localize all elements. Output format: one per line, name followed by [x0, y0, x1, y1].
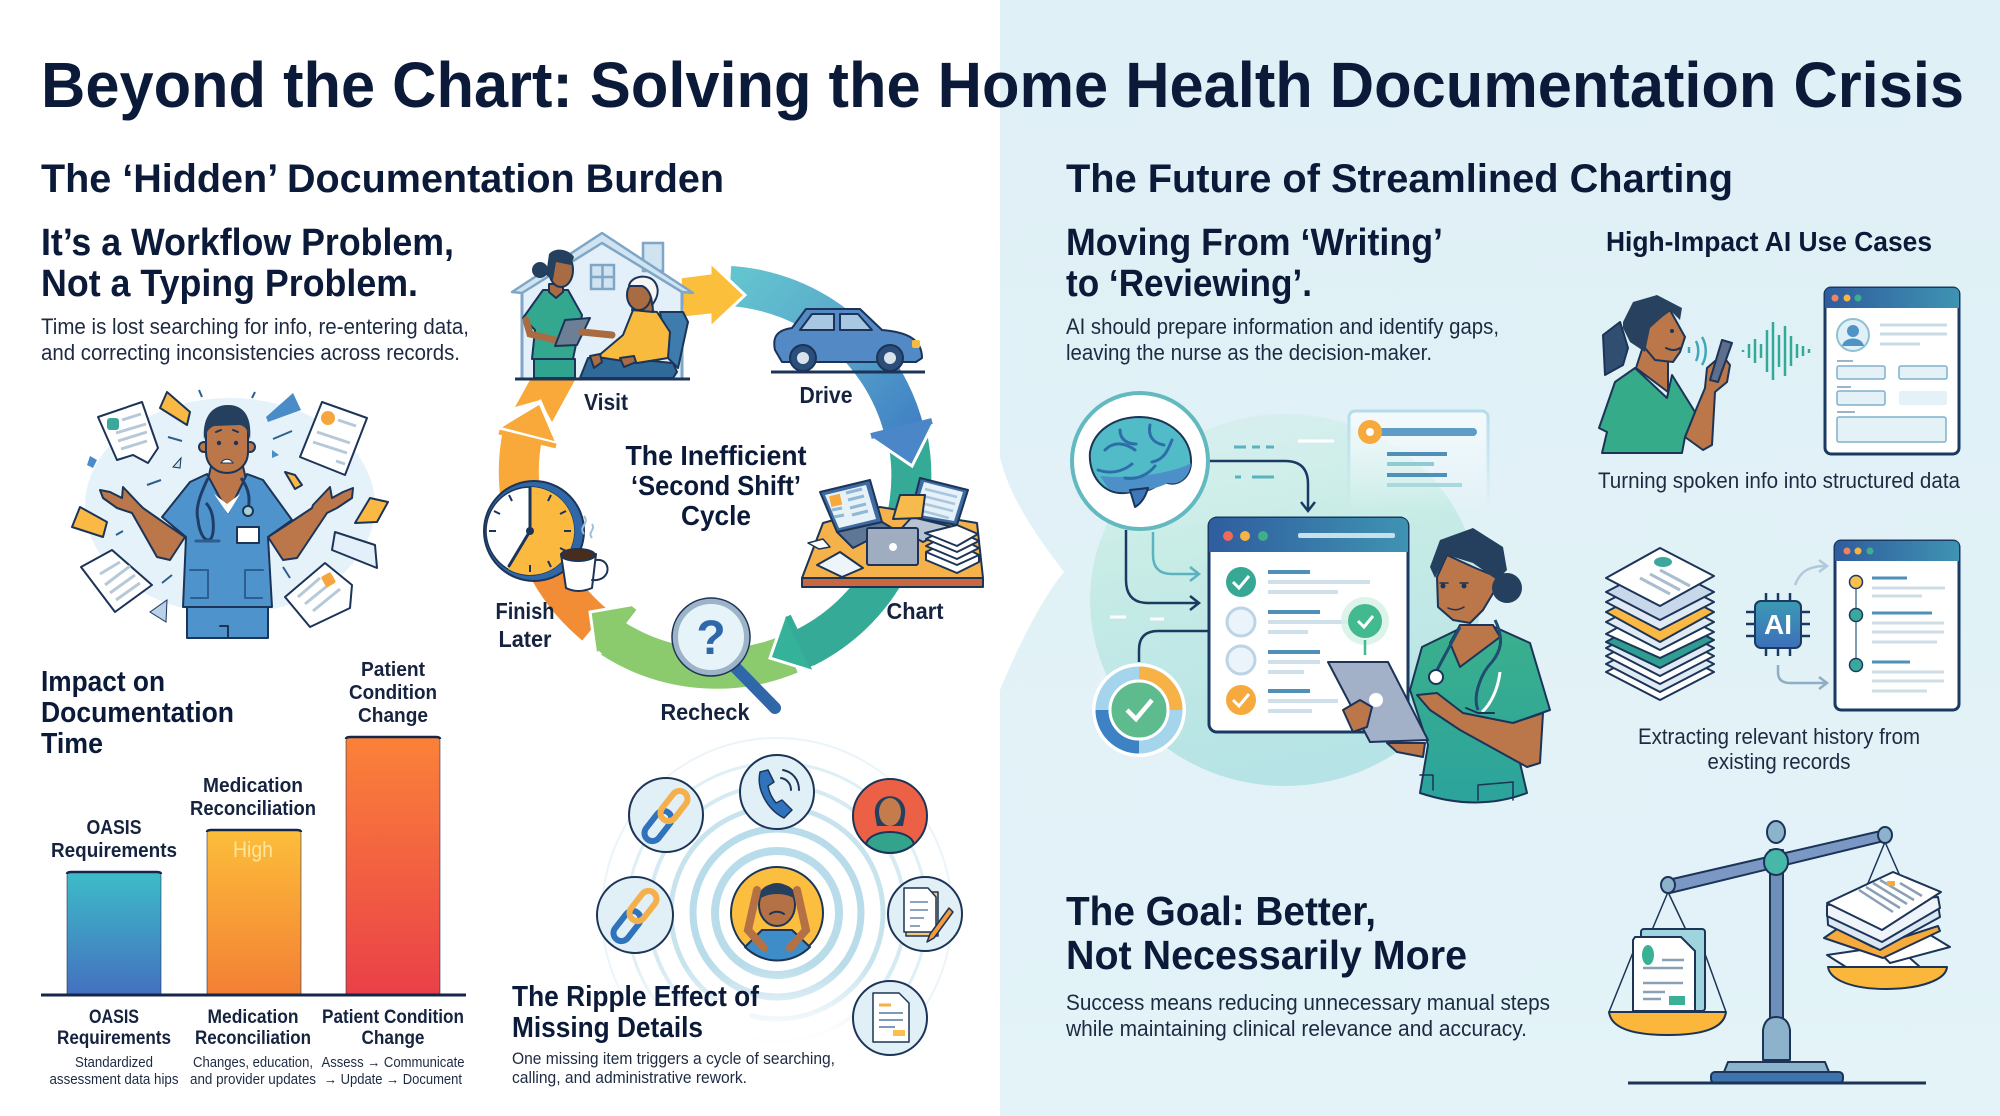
beam [1668, 830, 1888, 893]
icon: stack of records [1606, 548, 1714, 700]
bar: medication reconciliation: High [233, 837, 273, 862]
right pan documents [1824, 872, 1950, 989]
icon: broken link [629, 778, 703, 852]
papers [81, 402, 377, 627]
chart heading: Documentation [41, 697, 234, 729]
icon: car [771, 309, 925, 372]
arrow: finish later segment [545, 562, 595, 625]
use case: spoken info to structured data [1598, 288, 1961, 493]
labels: below bars: Medication [208, 1007, 298, 1028]
strings right [1866, 842, 1900, 888]
text block: the goal [1065, 888, 1550, 1041]
label: cycle title: The Inefficient [626, 440, 806, 471]
neck [206, 462, 248, 510]
label: cycle title: Cycle [681, 500, 751, 531]
labels: below bars: Reconciliation [195, 1028, 311, 1049]
patient chair [660, 312, 688, 368]
panel: left white background [0, 0, 1000, 1116]
caption [1638, 724, 1920, 774]
arms [100, 487, 353, 560]
scrubs [162, 474, 292, 607]
icon: form window [1825, 288, 1959, 454]
icon: magnifier with question mark [672, 598, 775, 708]
text block: ripple effect: Missing Details [512, 1012, 703, 1044]
icon: broken link 2 [597, 877, 673, 953]
arrow: chart segment [770, 440, 911, 672]
text block: writing to reviewing: AI should prepare information and identify gaps, [1066, 314, 1499, 339]
labels: below bars: Standardized [75, 1054, 153, 1071]
faded background window [1349, 411, 1488, 511]
text block: workflow problem: and correcting inconsistencies across records. [41, 340, 460, 365]
panel: right pale blue background [1000, 0, 2000, 1116]
illustration: overwhelmed nurse with flying papers [72, 390, 388, 638]
icon: sound wave [1743, 322, 1809, 380]
icon: brain [1072, 393, 1208, 529]
icon: timeline window [1835, 541, 1959, 710]
yellow fragments [72, 392, 388, 537]
text block: writing to reviewing: Moving From ‘Writing’ [1066, 222, 1443, 264]
labels: cycle steps: Later [498, 626, 552, 652]
labels: below bars [50, 1007, 464, 1088]
arrow: return to visit [497, 380, 575, 520]
labels: below bars: Requirements [57, 1028, 171, 1049]
tablet [1328, 662, 1428, 742]
icon: phone [740, 755, 814, 829]
pole [1770, 850, 1783, 1030]
illustration: ripple effect of missing details [500, 738, 962, 1116]
connectors [1126, 461, 1315, 662]
labels: below bars: Assess → Communicate [322, 1054, 464, 1071]
use case: extracting history from records [1606, 541, 1959, 774]
icon: AI chip [1746, 593, 1810, 656]
labels: above bars: Condition [349, 682, 437, 704]
head [1437, 555, 1497, 623]
labels: above bars [51, 659, 437, 862]
labels: below bars: OASIS [89, 1007, 139, 1028]
forearm [1417, 693, 1543, 767]
icon: document [853, 981, 927, 1055]
illustration: AI prepares, nurse reviews [1072, 393, 1550, 802]
text block: writing to reviewing: to ‘Reviewing’. [1066, 263, 1312, 305]
labels: cycle steps: Finish [496, 598, 554, 624]
heading: left section: The ‘Hidden’ Documentation Burden [41, 157, 724, 201]
labels: cycle steps: Chart [886, 598, 944, 624]
text block: the goal: The Goal: Better, [1066, 888, 1376, 934]
text block: ripple effect: calling, and administrative rework. [512, 1068, 747, 1087]
strings left [1609, 892, 1726, 1012]
text block: workflow problem: Time is lost searching for info, re-entering data, [41, 314, 469, 339]
labels: above bars: Requirements [51, 840, 177, 862]
icon: clock and coffee [484, 481, 608, 591]
icon: magnifier with question mark: ? [696, 612, 726, 665]
icon: checklist window [1209, 518, 1408, 732]
labels: above bars: Change [358, 705, 428, 727]
icon: woman speaking into phone [1599, 295, 1732, 453]
left pan documents [1609, 929, 1726, 1035]
labels: below bars: Change [362, 1028, 424, 1049]
arrow: recheck segment [590, 604, 790, 669]
chart: impact on documentation time [41, 659, 466, 1088]
icon: cluttered desk [802, 478, 983, 587]
chart heading: Time [41, 728, 103, 760]
icon: AI chip: AI [1764, 609, 1792, 640]
text block: writing to reviewing: leaving the nurse as the decision-maker. [1066, 340, 1432, 365]
stethoscope [1437, 620, 1501, 710]
icon: nurse with tablet [1328, 528, 1550, 802]
text block: workflow problem: It’s a Workflow Problem, [41, 222, 454, 264]
text block: workflow problem: Not a Typing Problem. [41, 263, 418, 305]
title: Beyond the Chart: Solving the Home Health Documentation Crisis [41, 49, 1964, 121]
caption: Extracting relevant history from [1638, 724, 1920, 749]
labels: above bars: OASIS [86, 817, 142, 839]
arrow: drive segment [730, 286, 935, 466]
text block: ripple effect: The Ripple Effect of [512, 981, 759, 1013]
icon: worried person [853, 779, 927, 853]
labels: cycle steps [496, 382, 944, 725]
labels: below bars: and provider updates [190, 1071, 316, 1088]
labels: below bars: → Update → Document [324, 1071, 463, 1088]
text block: ripple effect [512, 981, 835, 1087]
icon: stressed nurse centre [731, 867, 823, 960]
labels: cycle steps: Visit [584, 389, 628, 415]
text block: ripple effect: One missing item triggers a cycle of searching, [512, 1049, 835, 1068]
heading: right section: The Future of Streamlined Charting [1066, 157, 1733, 201]
icon: home visit [512, 233, 693, 379]
illustration: balance scale [1609, 821, 1950, 1083]
label: cycle title: ‘Second Shift’ [631, 470, 801, 501]
text block: workflow problem [41, 222, 469, 365]
text block: the goal: Not Necessarily More [1066, 932, 1467, 978]
base [1724, 1062, 1829, 1072]
heading: high-impact AI use cases: High-Impact AI Use Cases [1606, 226, 1932, 257]
visit nurse [534, 359, 575, 378]
labels: cycle steps: Drive [800, 382, 852, 408]
arrow: yellow out of the house [680, 262, 745, 328]
bar: medication reconciliation [207, 830, 301, 995]
labels: above bars: Patient [361, 659, 425, 681]
text block: the goal: Success means reducing unnecessary manual steps [1066, 990, 1550, 1015]
text block: writing to reviewing [1066, 222, 1499, 365]
cycle diagram: the inefficient second shift [484, 233, 983, 725]
blue fragments [87, 393, 301, 622]
chart heading [41, 666, 234, 760]
labels: below bars: Changes, education, [193, 1054, 313, 1071]
arrows from chip to timeline [1778, 560, 1827, 689]
text block: the goal: while maintaining clinical relevance and accuracy. [1065, 1016, 1527, 1041]
labels: below bars: assessment data hips [50, 1071, 178, 1088]
chart heading: Impact on [41, 666, 165, 698]
labels: below bars: Patient Condition [322, 1007, 464, 1028]
icon: gauge with check [1092, 663, 1186, 757]
caption: existing records [1708, 749, 1850, 774]
bar: patient condition change [346, 737, 440, 995]
pants [187, 607, 268, 638]
labels: cycle steps: Recheck [660, 699, 750, 725]
head [199, 442, 209, 452]
labels: above bars: Reconciliation [190, 798, 316, 820]
bar: OASIS requirements [67, 872, 161, 995]
labels: above bars: Medication [203, 775, 303, 797]
label: cycle title [626, 440, 806, 531]
caption: Turning spoken info into structured data [1598, 468, 1961, 493]
icon: document and pencil [888, 877, 962, 951]
